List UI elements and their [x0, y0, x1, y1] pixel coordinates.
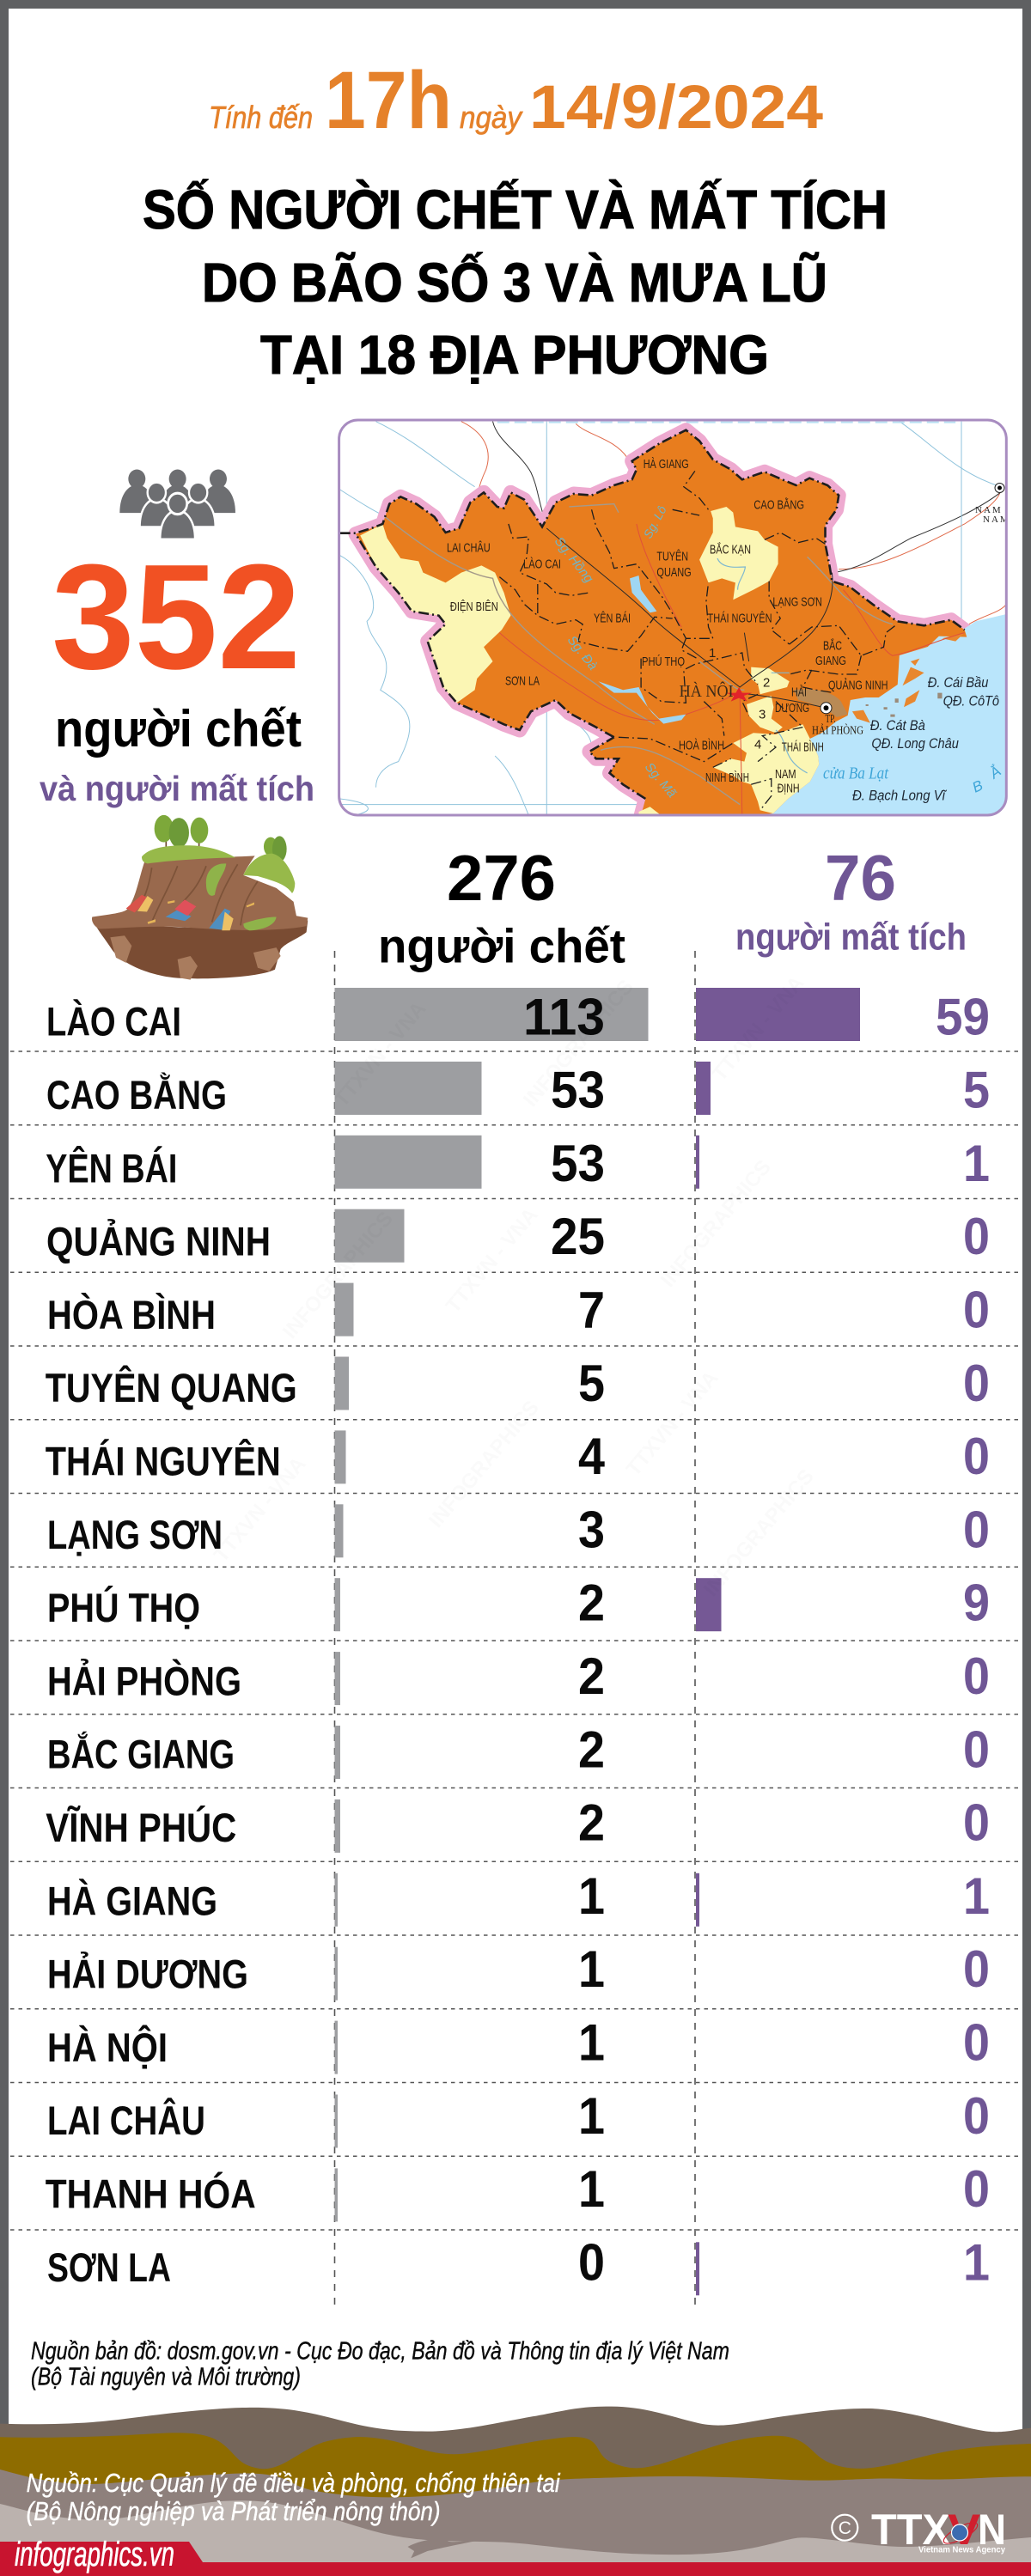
map labels: QĐ. Long Châu [871, 735, 959, 752]
row: Hòa Bình [47, 1282, 990, 1338]
data source note: Nguồn: Cục Quản lý đê điều và phòng, chống thiên tai [27, 2468, 561, 2498]
row: Phú Thọ: 9 [963, 1574, 990, 1632]
watermarks: INFOGRAPHICS [699, 1465, 819, 1601]
row: Hà Giang: HÀ GIANG [47, 1878, 217, 1923]
row: Lai Châu: 0 [963, 2087, 990, 2145]
map labels: NINH BÌNH [705, 770, 749, 785]
row: Lai Châu [47, 2087, 990, 2147]
row: Phú Thọ [47, 1574, 990, 1632]
map labels: NAM [975, 505, 1003, 515]
map labels: 1 [709, 646, 716, 661]
row: Quảng Ninh: QUẢNG NINH [46, 1219, 271, 1264]
row: Hà Giang: 1 [578, 1867, 605, 1925]
row: Lai Châu: LAI CHÂU [47, 2098, 205, 2143]
icon: group of people [119, 469, 235, 539]
watermarks: TTXVN - VNA [622, 1367, 723, 1481]
row: Hà Giang [47, 1867, 990, 1927]
map labels: Sg. Lô [641, 503, 669, 540]
map labels: B [970, 777, 985, 796]
infographics.vn badge [0, 2536, 1031, 2576]
row: Tuyên Quang: 5 [578, 1355, 605, 1412]
map labels: BẮC KẠN [710, 541, 751, 557]
data source note: (Bộ Nông nghiệp và Phát triển nông thôn) [27, 2496, 441, 2526]
row: Hải Phòng: 2 [578, 1647, 605, 1705]
watermarks: INFOGRAPHICS [424, 1397, 544, 1532]
row: Quảng Ninh: 25 [551, 1208, 605, 1265]
map labels: Đ. Bạch Long Vĩ [852, 788, 948, 804]
row: Hải Dương: 1 [578, 1940, 605, 1998]
logo: TTXVN: C [839, 2518, 851, 2538]
map labels: TUYÊN [656, 549, 688, 563]
footer waves [0, 2407, 1031, 2576]
row: Sơn La: SƠN LA [47, 2244, 171, 2290]
date line: ngày [460, 100, 523, 135]
row: Lạng Sơn: 3 [578, 1501, 605, 1558]
map labels: QUANG [656, 565, 692, 580]
row: Vĩnh Phúc: 2 [578, 1794, 605, 1852]
map labels: ĐỊNH [778, 782, 800, 796]
icon: landslide illustration [92, 815, 308, 980]
row: Bắc Giang [47, 1720, 990, 1779]
table column header: missing: 76 [825, 842, 896, 914]
row: Cao Bằng: 53 [551, 1062, 605, 1119]
date line [209, 55, 824, 146]
row: Lạng Sơn [47, 1501, 990, 1558]
table column header: deaths [378, 842, 625, 973]
map labels: NAM [983, 515, 1010, 525]
row: Hải Phòng: 0 [963, 1647, 990, 1705]
row: Vĩnh Phúc: 0 [963, 1794, 990, 1852]
row: Hà Nội: 0 [963, 2013, 990, 2072]
map labels: QUẢNG NINH [828, 679, 888, 693]
row: Yên Bái: 1 [963, 1135, 990, 1192]
map labels: HÀ GIANG [644, 457, 689, 472]
row: Hải Dương: HẢI DƯƠNG [47, 1952, 248, 1997]
row: Hải Dương [47, 1940, 990, 2001]
map labels: THÁI BÌNH [782, 740, 824, 754]
row: Tuyên Quang [46, 1355, 990, 1412]
logo: TTXVN: TTX [871, 2506, 950, 2554]
row: Hải Phòng: HẢI PHÒNG [47, 1658, 241, 1703]
title: TẠI 18 ĐỊA PHƯƠNG [260, 324, 769, 386]
row: Yên Bái [46, 1135, 990, 1192]
map labels: Sg. Hồng [552, 534, 596, 586]
watermarks: TTXVN - VNA [210, 1452, 310, 1567]
row: Sơn La: 1 [963, 2233, 990, 2291]
row: Phú Thọ: 2 [578, 1574, 605, 1632]
row: Quảng Ninh: 0 [963, 1208, 990, 1265]
map labels: BẮC [823, 638, 842, 654]
row: Thanh Hóa: 0 [963, 2160, 990, 2218]
row: Thái Nguyên [46, 1428, 990, 1485]
row: Hòa Bình: 0 [963, 1282, 990, 1338]
row: Cao Bằng: 5 [963, 1062, 990, 1119]
table column header: missing: người mất tích [735, 917, 967, 959]
row: Sơn La: 0 [578, 2233, 605, 2291]
row: Bắc Giang: BẮC GIANG [47, 1732, 235, 1777]
row: Thanh Hóa: 1 [578, 2160, 605, 2218]
logo: TTXVN [832, 2506, 1006, 2555]
map labels: ĐIỆN BIÊN [450, 600, 498, 614]
map labels: GIANG [815, 654, 846, 668]
row: Bắc Giang: 0 [963, 1720, 990, 1778]
row: Hà Nội: 1 [578, 2013, 605, 2072]
watermarks: INFOGRAPHICS [519, 976, 638, 1111]
row: Lạng Sơn: 0 [963, 1501, 990, 1558]
date line: 17h [325, 55, 452, 146]
map labels: 3 [759, 708, 766, 722]
title: SỐ NGƯỜI CHẾT VÀ MẤT TÍCH [143, 179, 888, 241]
row: Hà Giang: 1 [963, 1867, 990, 1925]
map labels: LAI CHÂU [447, 541, 491, 556]
map labels: CAO BẰNG [753, 496, 804, 512]
total number 352: 352 [52, 533, 301, 700]
row: Cao Bằng [46, 1062, 990, 1119]
row: Sơn La [47, 2233, 990, 2295]
date line: Tính đến [209, 100, 313, 135]
map source note: Nguồn bản đồ: dosm.gov.vn - Cục Đo đạc, Bản đồ và Thông tin địa lý Việt Nam [31, 2338, 729, 2366]
map labels: QĐ. CôTô [943, 693, 999, 709]
row: Hải Dương: 0 [963, 1940, 990, 1998]
map labels: cửa Ba Lạt [823, 764, 888, 783]
logo: TTXVN: Vietnam News Agency [918, 2546, 1005, 2555]
watermarks: INFOGRAPHICS [278, 1208, 398, 1343]
title: DO BÃO SỐ 3 VÀ MƯA LŨ [202, 252, 827, 314]
map labels: SƠN LA [505, 673, 540, 688]
row: Lào Cai: 59 [936, 988, 990, 1045]
row: Tuyên Quang: 0 [963, 1355, 990, 1412]
map labels: Đ. Cát Bà [870, 717, 925, 734]
table column header: deaths: người chết [378, 919, 625, 973]
row: Lào Cai [46, 988, 990, 1045]
map labels: LẠNG SƠN [772, 595, 822, 610]
map labels: Sg. Mã [642, 760, 680, 801]
row: Bắc Giang: 2 [578, 1720, 605, 1778]
map labels: PHÚ THỌ [642, 655, 685, 669]
row: Cao Bằng: CAO BẰNG [46, 1072, 227, 1117]
map labels: Ắ [986, 763, 1004, 783]
row: Quảng Ninh [46, 1208, 990, 1265]
map labels: 2 [763, 675, 770, 690]
map labels: HẢI [791, 685, 807, 700]
watermarks [210, 971, 819, 1601]
row: Yên Bái: 53 [551, 1135, 605, 1192]
row: Thái Nguyên: THÁI NGUYÊN [46, 1438, 281, 1484]
watermarks: TTXVN - VNA [708, 971, 808, 1086]
map labels: YÊN BÁI [594, 611, 631, 625]
row: Hòa Bình: 7 [578, 1282, 605, 1338]
title [143, 179, 888, 386]
row: Lạng Sơn: LẠNG SƠN [47, 1512, 223, 1557]
map labels: LÀO CAI [523, 557, 561, 572]
panel: total summary [40, 469, 314, 808]
label: người chết: người chết [55, 700, 302, 758]
map labels: HOÀ BÌNH [679, 739, 724, 753]
row: Thanh Hóa [46, 2160, 990, 2221]
row: Thái Nguyên: 0 [963, 1428, 990, 1485]
row: Phú Thọ: PHÚ THỌ [47, 1585, 200, 1630]
row: Lào Cai: LÀO CAI [46, 999, 181, 1044]
date line: 14/9/2024 [529, 74, 824, 142]
map labels: TP. [825, 713, 835, 726]
row: Hải Phòng [47, 1647, 990, 1705]
row: Hòa Bình: HÒA BÌNH [47, 1292, 216, 1337]
row: Thanh Hóa: THANH HÓA [46, 2171, 256, 2216]
logo: TTXVN: N [978, 2506, 1006, 2554]
map source note: (Bộ Tài nguyên và Môi trường) [31, 2364, 301, 2391]
row: Hà Nội [47, 2013, 990, 2074]
logo: TTXVN: V [948, 2506, 981, 2554]
watermarks: INFOGRAPHICS [656, 1156, 776, 1292]
label: và người mất tích: và người mất tích [40, 769, 314, 808]
table column header: missing [735, 842, 967, 959]
row: Lào Cai: 113 [523, 988, 605, 1045]
map labels: DƯƠNG [775, 701, 809, 716]
map labels: NAM [775, 767, 796, 782]
city markers [821, 483, 1004, 714]
watermarks: TTXVN - VNA [442, 1203, 542, 1318]
row: Hà Nội: HÀ NỘI [47, 2025, 168, 2070]
map source note [31, 2338, 729, 2391]
map labels: HẢI PHÒNG [812, 722, 863, 737]
row: Tuyên Quang: TUYÊN QUANG [46, 1365, 297, 1410]
map labels: Đ. Cái Bầu [928, 674, 989, 691]
map labels: HÀ NỘI [680, 680, 734, 701]
row: Vĩnh Phúc [46, 1794, 990, 1853]
infographics.vn badge: infographics.vn [15, 2536, 174, 2573]
map labels: 4 [754, 738, 761, 752]
data source note [27, 2468, 561, 2526]
row: Lai Châu: 1 [578, 2087, 605, 2145]
row: Yên Bái: YÊN BÁI [46, 1145, 177, 1191]
row: Thái Nguyên: 4 [578, 1428, 606, 1485]
watermarks: TTXVN - VNA [330, 997, 430, 1111]
row: Vĩnh Phúc: VĨNH PHÚC [46, 1805, 236, 1850]
map labels [447, 457, 1010, 804]
map labels: Sg. Đà [564, 633, 600, 673]
table column header: deaths: 276 [447, 842, 556, 914]
map of northern Vietnam [339, 420, 1010, 815]
map labels: THÁI NGUYÊN [708, 611, 772, 625]
